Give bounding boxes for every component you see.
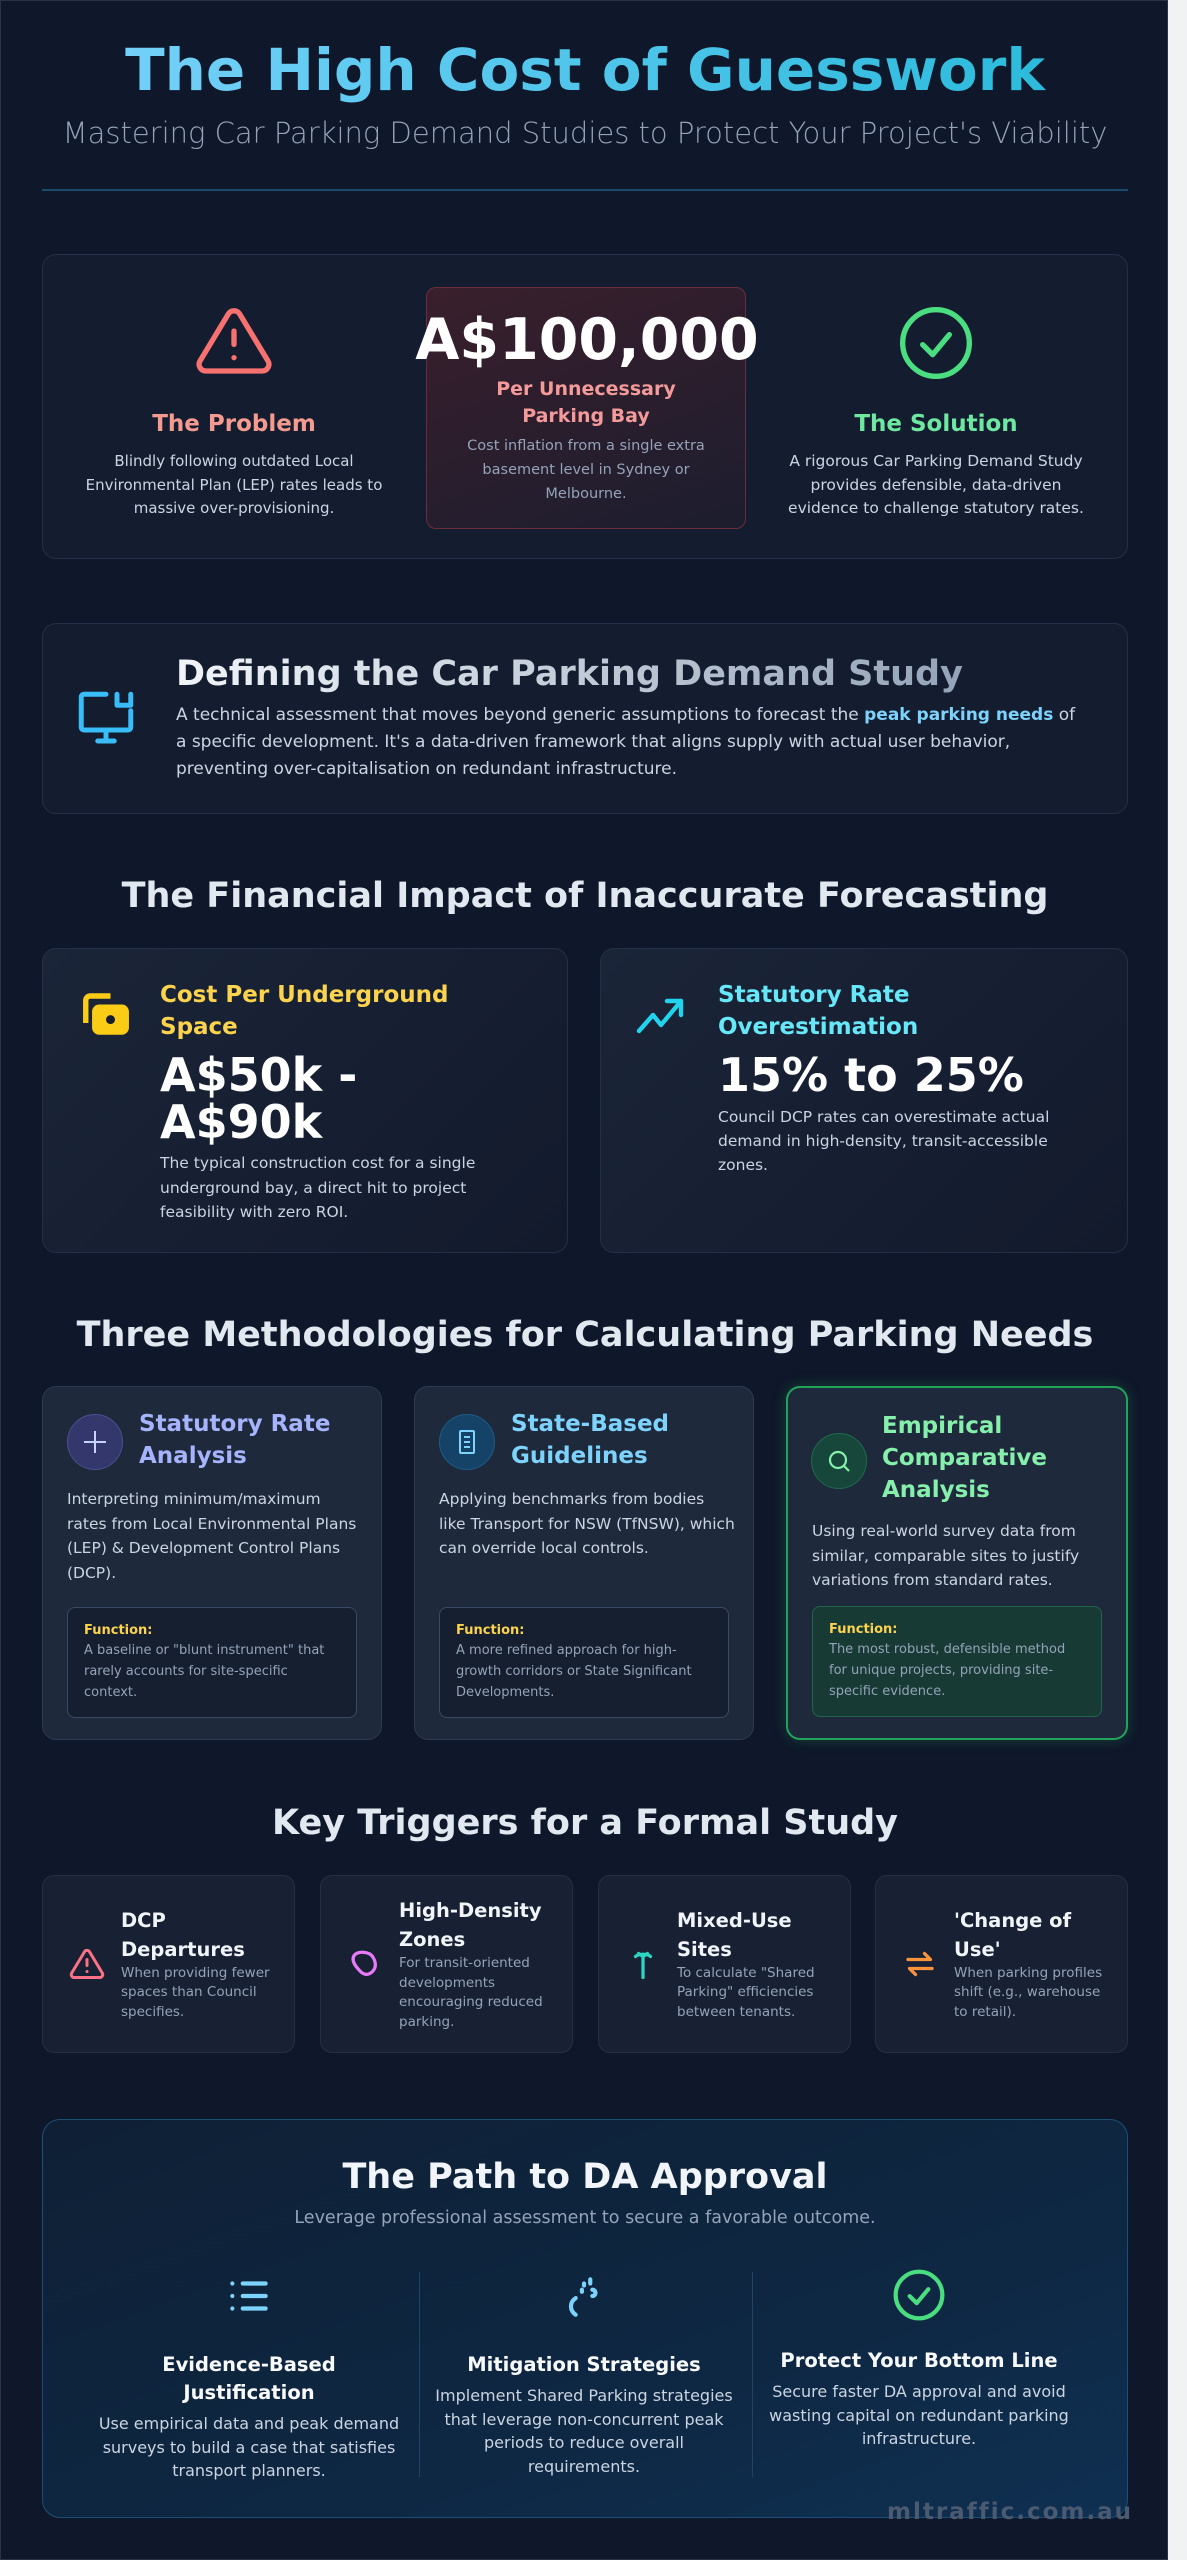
icon: arrows xyxy=(906,1952,934,1976)
panel: problem / cost / solution xyxy=(42,254,1128,559)
icon: money xyxy=(83,993,129,1035)
column: the problem: Blindly following outdated Local Environmental Plan (LEP) rates leads to massive over-provisioning. xyxy=(86,452,382,517)
column: evidence-based xyxy=(99,2281,399,2480)
panel: path to DA approval: Leverage professional assessment to secure a favorable outcome. xyxy=(294,2208,876,2228)
trigger: change of use: 'Change of Use' xyxy=(954,1909,1071,1961)
watermark: mltraffic.com.au xyxy=(887,2499,1133,2525)
heading: three methodologies: Three Methodologies for Calculating Parking Needs xyxy=(77,1315,1093,1355)
method card: state-based xyxy=(414,1386,754,1740)
panel: path to DA approval xyxy=(42,2119,1128,2518)
heading: financial impact: The Financial Impact of Inaccurate Forecasting xyxy=(122,876,1048,916)
icon: shared parking xyxy=(568,2277,598,2317)
card: cost per underground space: Cost Per Underground Space xyxy=(160,982,448,1040)
column: mitigation: Mitigation Strategies xyxy=(467,2353,701,2376)
column: the problem xyxy=(86,308,382,517)
trigger: change of use xyxy=(875,1875,1128,2053)
trigger: mixed-use: Mixed-Use Sites xyxy=(677,1909,792,1961)
column: the problem: The Problem xyxy=(152,411,316,437)
icon: warning xyxy=(70,1948,104,1979)
function box: Function: xyxy=(84,1623,153,1638)
function box: The most robust, defensible method for unique projects, providing site-specific evidence. xyxy=(829,1642,1065,1699)
icon: list xyxy=(230,2281,268,2311)
trigger: high-density: High-Density Zones xyxy=(399,1899,542,1951)
highlight: A$100,000 xyxy=(426,287,746,529)
trigger: high-density: For transit-oriented developments encouraging reduced parking. xyxy=(399,1955,543,2030)
column: mitigation: Implement Shared Parking strategies that leverage non-concurrent peak periods to reduce overall requirements. xyxy=(435,2386,733,2476)
trigger: DCP departures: When providing fewer spaces than Council specifies. xyxy=(121,1965,270,2020)
subtitle: Mastering Car Parking Demand Studies to Protect Your Project's Viability xyxy=(63,116,1107,150)
heading: Defining the Car Parking Demand Study xyxy=(176,654,963,694)
card: statutory overestimation: Statutory Rate Overestimation xyxy=(718,982,918,1040)
column: the solution: A rigorous Car Parking Demand Study provides defensible, data-driven evidence to challenge statutory rates. xyxy=(788,452,1084,517)
trigger: DCP departures xyxy=(42,1875,295,2053)
column: protect bottom line xyxy=(769,2270,1069,2448)
card: statutory overestimation xyxy=(600,948,1128,1253)
column: evidence-based: Evidence-Based Justification xyxy=(162,2353,336,2404)
column: the solution xyxy=(788,307,1084,517)
trigger: DCP departures: DCP Departures xyxy=(121,1909,245,1961)
highlight: A$100,000: Cost inflation from a single extra basement level in Sydney or Melbourne. xyxy=(467,438,705,502)
method card: empirical (highlighted) xyxy=(786,1386,1128,1740)
icon: signpost xyxy=(634,1952,652,1980)
icon: search xyxy=(811,1433,867,1489)
trigger: change of use: When parking profiles shift (e.g., warehouse to retail). xyxy=(954,1965,1102,2020)
icon: document xyxy=(439,1414,495,1470)
function box: A more refined approach for high-growth corridors or State Significant Developments. xyxy=(456,1643,692,1700)
icon: warning triangle xyxy=(196,308,272,374)
column: protect bottom line: Secure faster DA approval and avoid wasting capital on redundant parking infrastructure. xyxy=(769,2382,1069,2448)
icon: check circle xyxy=(900,307,972,379)
icon: trend up xyxy=(636,998,684,1034)
function box: Function: xyxy=(456,1623,525,1638)
method card: statutory: Interpreting minimum/maximum rates from Local Environmental Plans (LEP) & Development Control Plans (DCP). xyxy=(67,1490,356,1582)
column: evidence-based: Use empirical data and peak demand surveys to build a case that satisfies transport planners. xyxy=(99,2414,399,2480)
icon: plus xyxy=(67,1414,123,1470)
panel: path to DA approval: The Path to DA Approval xyxy=(342,2157,828,2197)
highlight: A$100,000: Per Unnecessary Parking Bay xyxy=(496,378,676,427)
function box xyxy=(812,1606,1102,1717)
heading: key triggers: Key Triggers for a Formal Study xyxy=(272,1803,898,1843)
method card: empirical (highlighted): Using real-world survey data from similar, comparable sites to justify variations from standard rates. xyxy=(812,1522,1079,1589)
method card: statutory xyxy=(42,1386,382,1740)
trigger: high-density xyxy=(320,1875,573,2053)
icon: check circle xyxy=(894,2270,944,2320)
function box xyxy=(67,1607,357,1718)
card: statutory overestimation: 15% to 25% xyxy=(718,1048,1024,1102)
title: The High Cost of Guesswork xyxy=(125,36,1045,104)
trigger: mixed-use xyxy=(598,1875,851,2053)
method card: statutory: Statutory Rate Analysis xyxy=(139,1411,330,1469)
column: mitigation xyxy=(435,2277,733,2476)
method card: state-based: Applying benchmarks from bodies like Transport for NSW (TfNSW), which can override local controls. xyxy=(439,1490,735,1557)
card: cost per underground space: The typical construction cost for a single underground bay, a direct hit to project feasibility with zero ROI. xyxy=(160,1154,475,1221)
highlight: A$100,000: A$100,000 xyxy=(415,307,759,373)
card: cost per underground space: A$50k - A$90k xyxy=(160,1048,357,1149)
card: cost per underground space xyxy=(42,948,568,1253)
function box: A baseline or "blunt instrument" that rarely accounts for site-specific context. xyxy=(84,1643,324,1700)
trigger: mixed-use: To calculate "Shared Parking" efficiencies between tenants. xyxy=(677,1965,815,2020)
text: A technical assessment that moves beyond generic assumptions to forecast the peak parking needs of a specific development. It's a data-driven framework that aligns supply with actual user behavior, preventing over-capitalisation on redundant infrastructure. xyxy=(176,705,1075,779)
method card: empirical (highlighted): Empirical Comparative Analysis xyxy=(882,1413,1047,1503)
icon: monitor xyxy=(78,692,134,744)
function box: Function: xyxy=(829,1622,898,1637)
function box xyxy=(439,1607,729,1718)
panel: defining the study xyxy=(42,623,1128,814)
icon: blob xyxy=(351,1950,377,1976)
column: the solution: The Solution xyxy=(854,411,1018,437)
card: statutory overestimation: Council DCP rates can overestimate actual demand in high-density, transit-accessible zones. xyxy=(718,1108,1049,1174)
method card: state-based: State-Based Guidelines xyxy=(511,1411,669,1469)
column: protect bottom line: Protect Your Bottom Line xyxy=(780,2349,1058,2372)
